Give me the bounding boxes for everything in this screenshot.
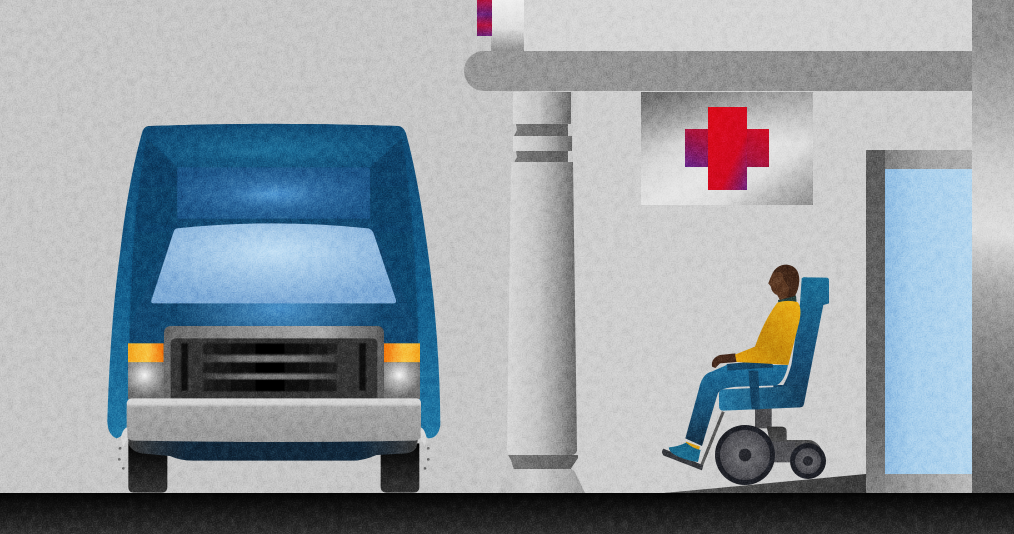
underbody	[128, 437, 418, 461]
bumper	[127, 398, 421, 442]
pillar	[498, 92, 585, 493]
left headlamp	[128, 343, 165, 399]
mudflap brackets and bolts	[118, 427, 430, 470]
roof cap	[143, 124, 406, 167]
ambulance body	[107, 124, 440, 438]
building corner column	[972, 0, 1014, 493]
trousers	[685, 365, 788, 446]
upper cab panel	[177, 167, 370, 221]
wheelchair user	[662, 265, 829, 485]
sock	[685, 442, 700, 451]
grille	[171, 338, 377, 402]
small wheel	[790, 443, 826, 479]
sweater	[735, 301, 800, 365]
post and motor base	[755, 408, 825, 462]
lower building wall	[573, 91, 973, 493]
armrest	[727, 360, 773, 409]
hood	[129, 219, 418, 343]
hand	[712, 353, 737, 368]
canopy beam	[464, 51, 972, 91]
head	[768, 265, 799, 300]
door glass	[885, 169, 972, 474]
upper building wall	[524, 0, 972, 52]
ground	[0, 493, 1014, 534]
seat cushion	[719, 386, 800, 411]
right side panel	[370, 138, 418, 337]
neck collar	[778, 295, 797, 307]
footrest strut	[701, 412, 723, 467]
grille surround	[164, 326, 384, 402]
shoe	[669, 443, 701, 462]
ambulance	[107, 124, 440, 493]
big wheel	[715, 425, 775, 485]
footplate	[662, 449, 703, 470]
right headlamp	[383, 343, 420, 399]
windshield	[151, 223, 396, 303]
left side panel	[129, 138, 177, 337]
seat back and headrest	[773, 277, 829, 407]
rear wheels	[128, 443, 419, 493]
red cross	[685, 107, 769, 190]
hospital door	[866, 150, 972, 493]
upper sign fragment	[477, 0, 524, 52]
hospital sign	[641, 92, 813, 205]
wheelchair ramp	[664, 474, 866, 493]
